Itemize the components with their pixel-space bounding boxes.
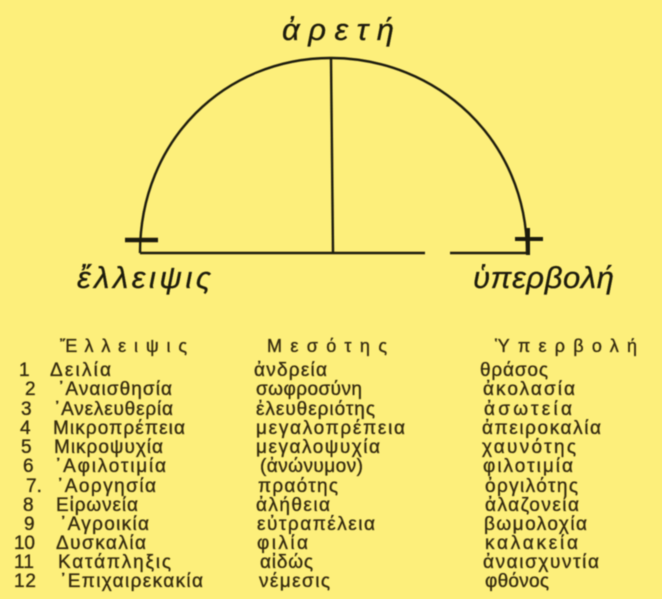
mean terms: αἰδώς	[260, 552, 313, 573]
excess terms: ὀργιλότης	[485, 476, 578, 497]
mean terms: (ἀνώνυμον)	[260, 456, 363, 477]
row numbers: 4	[20, 418, 31, 439]
arc	[140, 58, 527, 253]
deficiency terms: Εἰρωνεία	[56, 495, 138, 516]
mean terms: μεγαλοψυχία	[256, 437, 380, 458]
excess terms: ἀλαζονεία	[485, 495, 579, 516]
excess terms: ἀπειροκαλία	[482, 418, 601, 439]
column: mean	[254, 336, 405, 592]
mean terms: εὐτραπέλεια	[257, 514, 375, 535]
mean terms: νέμεσις	[259, 571, 330, 592]
excess terms: ἀσωτεία	[484, 399, 572, 420]
deficiency terms: ᾿Επιχαιρεκακία	[60, 571, 203, 592]
row numbers: 6	[23, 456, 34, 477]
row numbers: 10	[14, 533, 35, 554]
deficiency terms: Κατάπληξις	[58, 552, 171, 573]
deficiency terms: ᾿Ανελευθερία	[54, 399, 173, 420]
minus sign	[125, 238, 158, 242]
deficiency terms	[50, 360, 203, 592]
mean terms: ἀνδρεία	[254, 360, 327, 381]
column: deficiency	[14, 336, 203, 592]
deficiency terms: Μικροπρέπεια	[53, 418, 185, 439]
deficiency terms: Δειλία	[50, 360, 111, 381]
row numbers: 12	[14, 571, 36, 592]
excess terms: βωμολοχία	[484, 514, 587, 535]
heading: Ἔλλειψις	[60, 336, 187, 356]
row numbers: 9	[24, 514, 35, 535]
excess terms: ἀκολασία	[483, 379, 575, 400]
excess terms: φιλοτιμία	[483, 456, 573, 477]
label: virtue: ἀρετή	[282, 12, 394, 47]
row numbers: 11	[14, 552, 34, 573]
excess terms: χαυνότης	[482, 437, 576, 458]
mean terms: φιλία	[257, 533, 308, 554]
excess terms: καλακεία	[485, 533, 578, 554]
row numbers: 5	[21, 437, 32, 458]
excess terms: φθόνος	[485, 571, 549, 592]
row numbers: 2	[25, 379, 36, 400]
heading: Μεσότης	[267, 336, 387, 356]
mean terms	[254, 360, 405, 592]
mean terms: ἐλευθεριότης	[256, 399, 375, 420]
centre line	[331, 58, 333, 253]
mean terms: μεγαλοπρέπεια	[256, 418, 405, 439]
deficiency terms: ᾿Αγροικία	[60, 514, 149, 535]
excess terms	[480, 360, 601, 592]
row numbers: 3	[21, 399, 32, 420]
plus sign	[515, 228, 543, 255]
excess terms: ἀναισχυντία	[483, 552, 599, 573]
deficiency terms: Δυσκαλία	[56, 533, 146, 554]
row numbers: 1	[19, 360, 30, 381]
row numbers: 8	[23, 495, 34, 516]
deficiency terms: Μικροψυχία	[54, 437, 163, 458]
row numbers: 7.	[26, 476, 42, 497]
diagram: semicircle of virtue	[125, 58, 543, 255]
row numbers	[14, 360, 42, 592]
column: excess	[480, 336, 637, 592]
mean terms: σωφροσύνη	[256, 379, 362, 400]
baseline	[140, 252, 527, 254]
label: excess: ὑπερβολή	[473, 260, 614, 295]
excess terms: θράσος	[480, 360, 548, 381]
mean terms: πραότης	[258, 476, 338, 497]
label: deficiency: ἔλλειψις	[77, 260, 211, 295]
deficiency terms: ᾿Αοργησία	[57, 476, 156, 497]
heading: Ὑπερβολή	[495, 336, 637, 356]
deficiency terms: ᾿Αφιλοτιμία	[55, 456, 166, 477]
deficiency terms: ᾿Αναισθησία	[58, 379, 172, 400]
mean terms: ἀλήθεια	[256, 495, 330, 516]
